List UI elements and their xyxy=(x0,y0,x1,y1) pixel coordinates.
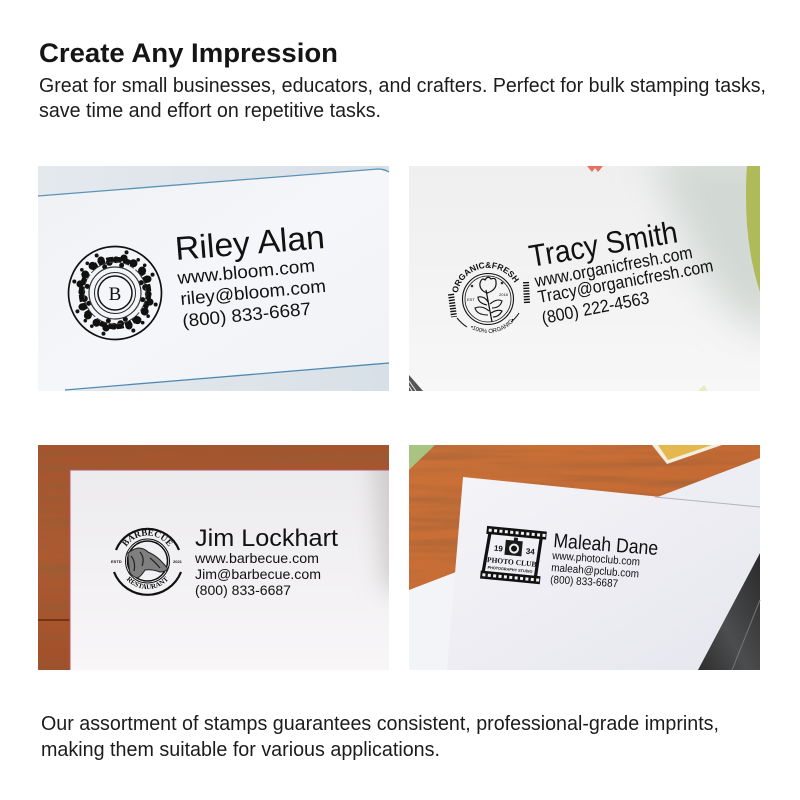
closing text: making them suitable for various applications. xyxy=(41,739,440,761)
stamp text: Tracy Smith: (800) 222-4563 xyxy=(540,287,651,328)
panel: Jim Lockhart stamp on paper over wood xyxy=(38,445,389,670)
stamp text: Tracy Smith: www.organicfresh.com xyxy=(532,242,694,291)
icon: photo club film strip stamp: PHOTOGRAPHY STUDIO xyxy=(487,566,533,574)
panel: Maleah Dane stamp on stacked paper over wood xyxy=(409,445,760,670)
stamp text: Riley Alan: riley@bloom.com xyxy=(180,276,327,309)
intro text: save time and effort on repetitive tasks. xyxy=(39,100,381,122)
stamp text: Riley Alan: Riley Alan xyxy=(174,218,326,267)
stamp text: Maleah Dane: maleah@pclub.com xyxy=(551,562,639,580)
stamp text: Riley Alan xyxy=(174,218,327,331)
intro text: Great for small businesses, educators, and crafters. Perfect for bulk stamping tasks, xyxy=(39,75,766,97)
stamp text: Maleah Dane xyxy=(550,530,659,590)
stamp text: Tracy Smith: Tracy@organicfresh.com xyxy=(536,255,715,307)
intro text xyxy=(39,75,766,122)
title: Create Any Impression xyxy=(39,38,338,68)
stamp text: Maleah Dane: www.photoclub.com xyxy=(551,550,640,568)
icon: floral monogram stamp: B xyxy=(109,284,121,305)
stamp text: Jim Lockhart: www.barbecue.com xyxy=(194,550,319,566)
stamp text: Riley Alan: (800) 833-6687 xyxy=(181,299,312,331)
icon: barbecue restaurant badge: RESTAURANT xyxy=(126,576,168,590)
icon: organic and fresh badge xyxy=(448,262,530,333)
panel: Riley Alan stamp on blue-edged card xyxy=(38,166,389,391)
icon: organic and fresh badge: •100% ORGANIC• xyxy=(471,318,514,333)
icon: photo club film strip stamp xyxy=(480,526,547,584)
closing text xyxy=(41,713,719,761)
icon: photo club film strip stamp: PHOTO CLUB xyxy=(487,555,537,569)
stamp text: Jim Lockhart: (800) 833-6687 xyxy=(195,582,291,598)
icon: barbecue restaurant badge: 2021 xyxy=(173,559,183,564)
stamp text: Jim Lockhart: Jim@barbecue.com xyxy=(195,566,321,582)
icon: organic and fresh badge: ORGANIC&FRESH xyxy=(452,262,520,292)
icon: floral monogram stamp xyxy=(68,246,162,340)
icon: photo club film strip stamp: 34 xyxy=(525,547,536,557)
icon: barbecue restaurant badge: BARBECUE xyxy=(122,530,173,547)
stamp text: Maleah Dane: Maleah Dane xyxy=(553,530,659,560)
stamp text: Tracy Smith: Tracy Smith xyxy=(526,214,680,274)
panel: Tracy Smith stamp on white paper xyxy=(408,166,760,391)
stamp text: Riley Alan: www.bloom.com xyxy=(176,256,316,288)
stamp text: Jim Lockhart xyxy=(194,525,338,598)
stamp text: Tracy Smith xyxy=(526,214,715,328)
stamp text: Jim Lockhart: Jim Lockhart xyxy=(195,525,338,552)
icon: photo club film strip stamp: 19 xyxy=(494,544,504,554)
closing text: Our assortment of stamps guarantees consistent, professional-grade imprints, xyxy=(41,713,719,735)
icon: barbecue restaurant badge xyxy=(111,528,183,596)
icon: barbecue restaurant badge: ESTD xyxy=(111,559,122,564)
stamp text: Maleah Dane: (800) 833-6687 xyxy=(550,574,618,590)
icon: organic and fresh badge: EST xyxy=(467,297,475,302)
icon: organic and fresh badge: 2018 xyxy=(499,292,509,297)
